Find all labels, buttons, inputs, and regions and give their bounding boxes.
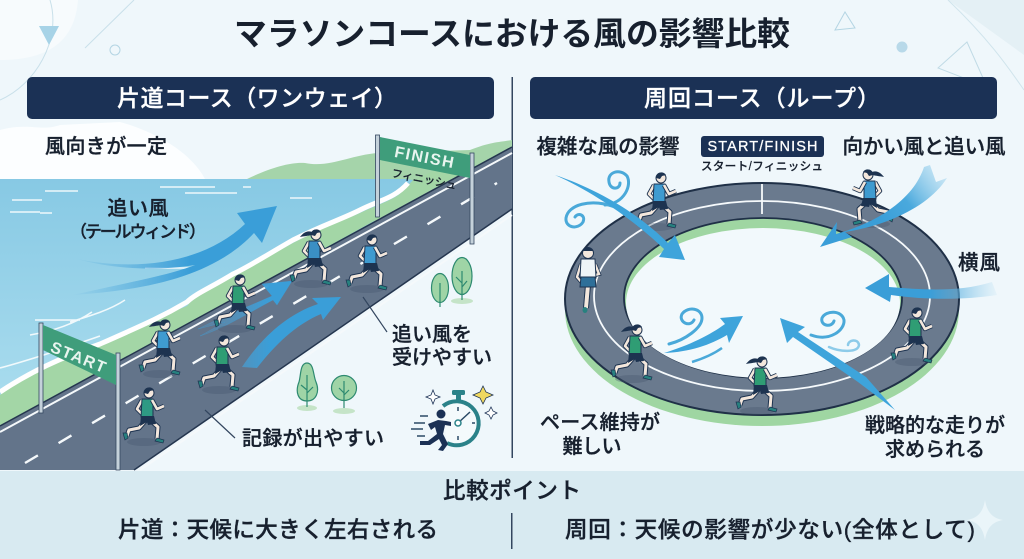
panel: loop course bbox=[536, 136, 1006, 461]
label: tailwind: 追い風 bbox=[108, 197, 168, 220]
label: hard to keep pace: 難しい bbox=[562, 435, 622, 458]
title: マラソンコースにおける風の影響比較 bbox=[234, 16, 790, 52]
panel: one-way course bbox=[0, 122, 512, 470]
tree bbox=[297, 363, 318, 411]
panel heading: one-way course: 片道コース（ワンウェイ） bbox=[117, 85, 397, 111]
label: complex wind effects: 複雑な風の影響 bbox=[536, 136, 680, 158]
runner 4 bbox=[214, 274, 255, 333]
background decoration bbox=[0, 0, 1024, 100]
runner top left bbox=[635, 172, 676, 231]
tree bbox=[332, 376, 356, 414]
label: hard to keep pace bbox=[540, 411, 660, 458]
comparison heading: 比較ポイント bbox=[443, 478, 581, 504]
panel divider bbox=[512, 77, 513, 458]
runner 5 bbox=[290, 229, 331, 288]
panel: comparison points bbox=[0, 471, 1024, 559]
gate: start bbox=[39, 323, 120, 470]
runner bottom bbox=[736, 356, 777, 415]
arrow: tailwind over sea bbox=[73, 206, 277, 295]
arrow: lower right wind with swirl and pointer bbox=[780, 312, 895, 410]
runner 1 bbox=[123, 387, 164, 446]
label: crosswind: 横風 bbox=[958, 252, 1000, 274]
runner 6 bbox=[346, 234, 387, 293]
circuit track bbox=[565, 183, 959, 426]
label: strategic running bbox=[865, 414, 1005, 461]
runner 3 bbox=[198, 335, 239, 394]
runner top right bbox=[853, 169, 894, 228]
start/finish badge: START/FINISH bbox=[708, 139, 818, 155]
comparison: one-way: 片道：天候に大きく左右される bbox=[118, 518, 438, 542]
arrow: complex wind bbox=[555, 175, 685, 260]
runner lower left bbox=[611, 324, 652, 383]
tree bbox=[432, 274, 448, 307]
runner 2 bbox=[139, 319, 180, 378]
panel heading: loop course bbox=[530, 77, 997, 119]
label: hard to keep pace: ペース維持が bbox=[540, 411, 660, 434]
label: strategic running: 求められる bbox=[885, 438, 985, 461]
runner right bbox=[891, 307, 932, 366]
gate: finish: FINISH bbox=[393, 144, 455, 172]
sparkle decoration bbox=[967, 500, 1003, 540]
panel heading: loop course: 周回コース（ループ） bbox=[644, 85, 880, 111]
gate: start: START bbox=[48, 339, 108, 377]
scenery: cloud, hills and sea bbox=[0, 122, 512, 428]
arrow: lower left wind with swirl bbox=[664, 309, 743, 362]
comparison divider bbox=[511, 513, 512, 549]
arrow: crosswind bbox=[865, 274, 997, 302]
arrow: road wind upper bbox=[198, 281, 292, 336]
label: easy to catch tailwind: 追い風を bbox=[392, 323, 472, 346]
icon: stopwatch with running figure bbox=[411, 386, 497, 451]
gate: finish: フィニッシュ bbox=[390, 168, 458, 192]
gate: finish bbox=[376, 135, 474, 244]
road bbox=[0, 147, 512, 470]
label: head and tail wind: 向かい風と追い風 bbox=[842, 136, 1006, 158]
start/finish badge: スタート/フィニッシュ bbox=[701, 160, 823, 173]
panel heading: one-way course bbox=[27, 77, 494, 119]
trees bbox=[297, 258, 473, 414]
leader lines bbox=[205, 297, 387, 438]
start/finish badge bbox=[701, 136, 824, 173]
runner left, front-on bbox=[577, 248, 599, 313]
label: strategic running: 戦略的な走りが bbox=[865, 414, 1005, 437]
swirls upper left bbox=[566, 172, 629, 227]
label: easy to catch tailwind bbox=[392, 323, 492, 369]
runners on one-way road bbox=[123, 229, 387, 446]
label: tailwind katakana: （テールウィンド） bbox=[70, 222, 206, 242]
label: good for records: 記録が出やすい bbox=[242, 427, 384, 450]
arrow: head and tail wind bbox=[820, 165, 947, 247]
label: easy to catch tailwind: 受けやすい bbox=[392, 346, 492, 369]
arrow: road wind lower bbox=[242, 297, 341, 368]
comparison: loop: 周回：天候の影響が少ない(全体として) bbox=[565, 518, 975, 542]
label: constant wind: 風向きが一定 bbox=[45, 135, 167, 158]
tree bbox=[451, 258, 473, 304]
runners on loop bbox=[577, 169, 932, 415]
